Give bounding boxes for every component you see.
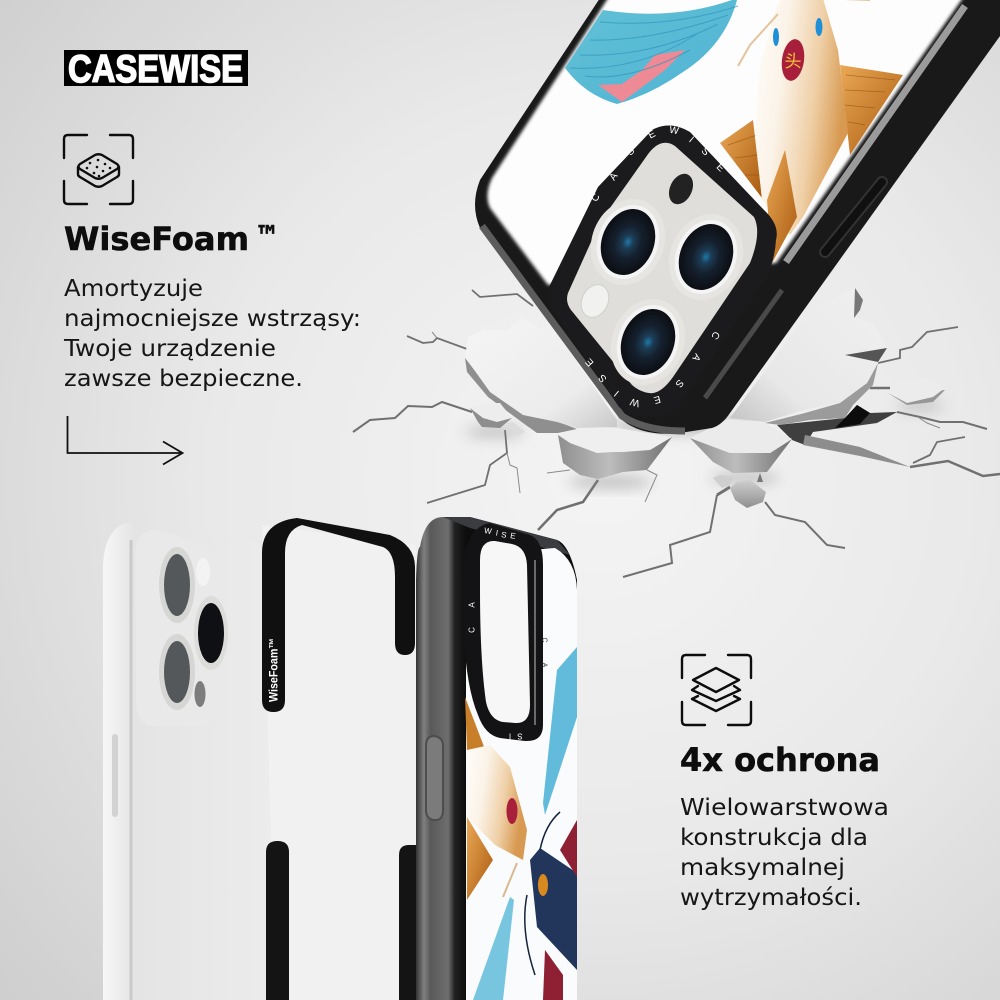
art panel — [465, 548, 577, 1000]
side button — [825, 182, 882, 252]
ring lettering: A — [468, 602, 476, 608]
ring lettering: S — [596, 372, 609, 384]
heading: WiseFoam: WiseFoam — [64, 220, 249, 258]
ring lettering: E — [714, 162, 726, 174]
art: navy fish — [530, 848, 577, 970]
case body — [475, 0, 1000, 434]
text block: 4x ochrona description: konstrukcja dla — [680, 825, 868, 851]
ring lettering: E — [583, 356, 596, 368]
art: blue fin lower — [473, 897, 514, 1000]
dark fissure — [777, 405, 897, 445]
side gloss — [786, 6, 965, 262]
art: koi body — [755, 0, 848, 235]
text block: WiseFoam description: najmocniejsze wstrząsy: — [64, 306, 361, 332]
ring lettering: S — [625, 146, 638, 158]
ring lettering: I — [686, 135, 696, 145]
art: blue fin — [565, 0, 745, 104]
text block: WiseFoam description: Twoje urządzenie — [63, 336, 276, 362]
ring lettering: E — [652, 393, 662, 405]
WiseFoam black strip: top: WiseFoam™ — [266, 638, 280, 702]
camera ring — [547, 125, 777, 417]
art: koi eyes — [773, 18, 822, 46]
text block: 4x ochrona description: wytrzymałości. — [680, 885, 862, 911]
ring lettering: S — [672, 377, 685, 389]
camera bump — [135, 530, 218, 726]
text block: WiseFoam description: Amortyzuje — [64, 276, 203, 302]
ring lettering: C — [589, 192, 603, 204]
arrow — [68, 416, 182, 464]
lower-left gray band — [482, 226, 685, 431]
art: blue fin — [543, 647, 577, 815]
ring lettering: S — [517, 732, 523, 740]
text block: 4x ochrona description: maksymalnej — [680, 855, 845, 881]
art: orange koi fin — [467, 817, 493, 900]
wall chunk: front right — [690, 419, 792, 473]
wall chunk: right — [730, 288, 910, 467]
WiseFoam black strip: bottom left — [266, 841, 289, 1000]
top edge band — [443, 517, 570, 555]
icon: stacked layers in scan brackets — [682, 655, 751, 725]
ring lettering: A — [689, 351, 702, 363]
back art panel — [487, 0, 965, 285]
ring lettering: S — [501, 530, 507, 540]
heading: 4x ochrona: 4x ochrona — [680, 741, 880, 779]
WiseFoam black strip: bottom right — [399, 845, 416, 1000]
cracked wall — [353, 288, 1000, 577]
text block: 4x ochrona description — [680, 795, 889, 911]
heading: WiseFoam: ™ — [255, 220, 279, 255]
rear cameras — [576, 170, 756, 396]
phone: white back — [103, 521, 275, 1000]
art: koi red spot — [779, 38, 807, 82]
art: koi barbel — [503, 863, 517, 897]
wall chunk: round rock right — [888, 377, 945, 405]
text block: WiseFoam description: zawsze bezpieczne. — [64, 366, 303, 392]
grey wedge — [803, 435, 910, 467]
ring lettering: E — [646, 128, 658, 141]
chunk top — [730, 288, 887, 422]
ring lettering: C — [708, 329, 722, 341]
icon: foam pad in scan brackets — [64, 135, 133, 204]
side button — [426, 736, 443, 820]
thin crack branches — [432, 332, 940, 502]
dark triangle — [845, 348, 887, 362]
wall chunk: small left — [470, 403, 525, 436]
WiseFoam black strip: top — [262, 518, 415, 712]
ring lettering: I — [495, 528, 499, 538]
ring lettering: A — [540, 663, 548, 668]
ring lettering: I — [509, 732, 511, 740]
phone case: side view — [416, 517, 577, 1000]
ring lettering: S — [699, 146, 711, 158]
wall chunk: small bottom — [713, 473, 766, 508]
logo: CASEWISE: CASEWISE — [68, 48, 243, 91]
chunk shadows — [465, 402, 944, 488]
wall chunk: left — [465, 318, 617, 433]
art: navy fish antennae — [525, 812, 560, 975]
frosted WiseFoam layer — [262, 525, 416, 1000]
ring lettering: W — [628, 395, 641, 409]
art: orange koi top fin — [465, 697, 488, 757]
phone in case: top — [475, 0, 1000, 434]
art: koi red spot: 头 — [784, 52, 802, 71]
crack lines — [353, 290, 1000, 577]
art: red fins — [543, 820, 577, 1000]
ring lettering: I — [612, 388, 622, 398]
art: koi fin left — [720, 120, 762, 198]
ring lettering: W — [484, 526, 493, 536]
lenses — [159, 547, 228, 710]
chunk side — [765, 363, 878, 425]
text block: WiseFoam description — [63, 276, 361, 392]
wall chunk: front left — [558, 428, 672, 479]
ring lettering: W — [668, 125, 680, 137]
text block: 4x ochrona description: Wielowarstwowa — [680, 795, 889, 821]
art: koi fin right — [840, 65, 903, 155]
ring lettering — [583, 125, 726, 409]
spike — [854, 288, 863, 318]
ring lettering: E — [510, 531, 516, 541]
art: koi tail — [767, 150, 797, 263]
ring lettering — [468, 526, 548, 740]
ring lettering: C — [540, 637, 548, 643]
camera ring — [463, 523, 548, 741]
art: koi barbels — [738, 0, 870, 66]
ring lettering: C — [468, 627, 476, 633]
art: orange koi body — [467, 745, 527, 860]
ring lettering: A — [608, 171, 621, 183]
